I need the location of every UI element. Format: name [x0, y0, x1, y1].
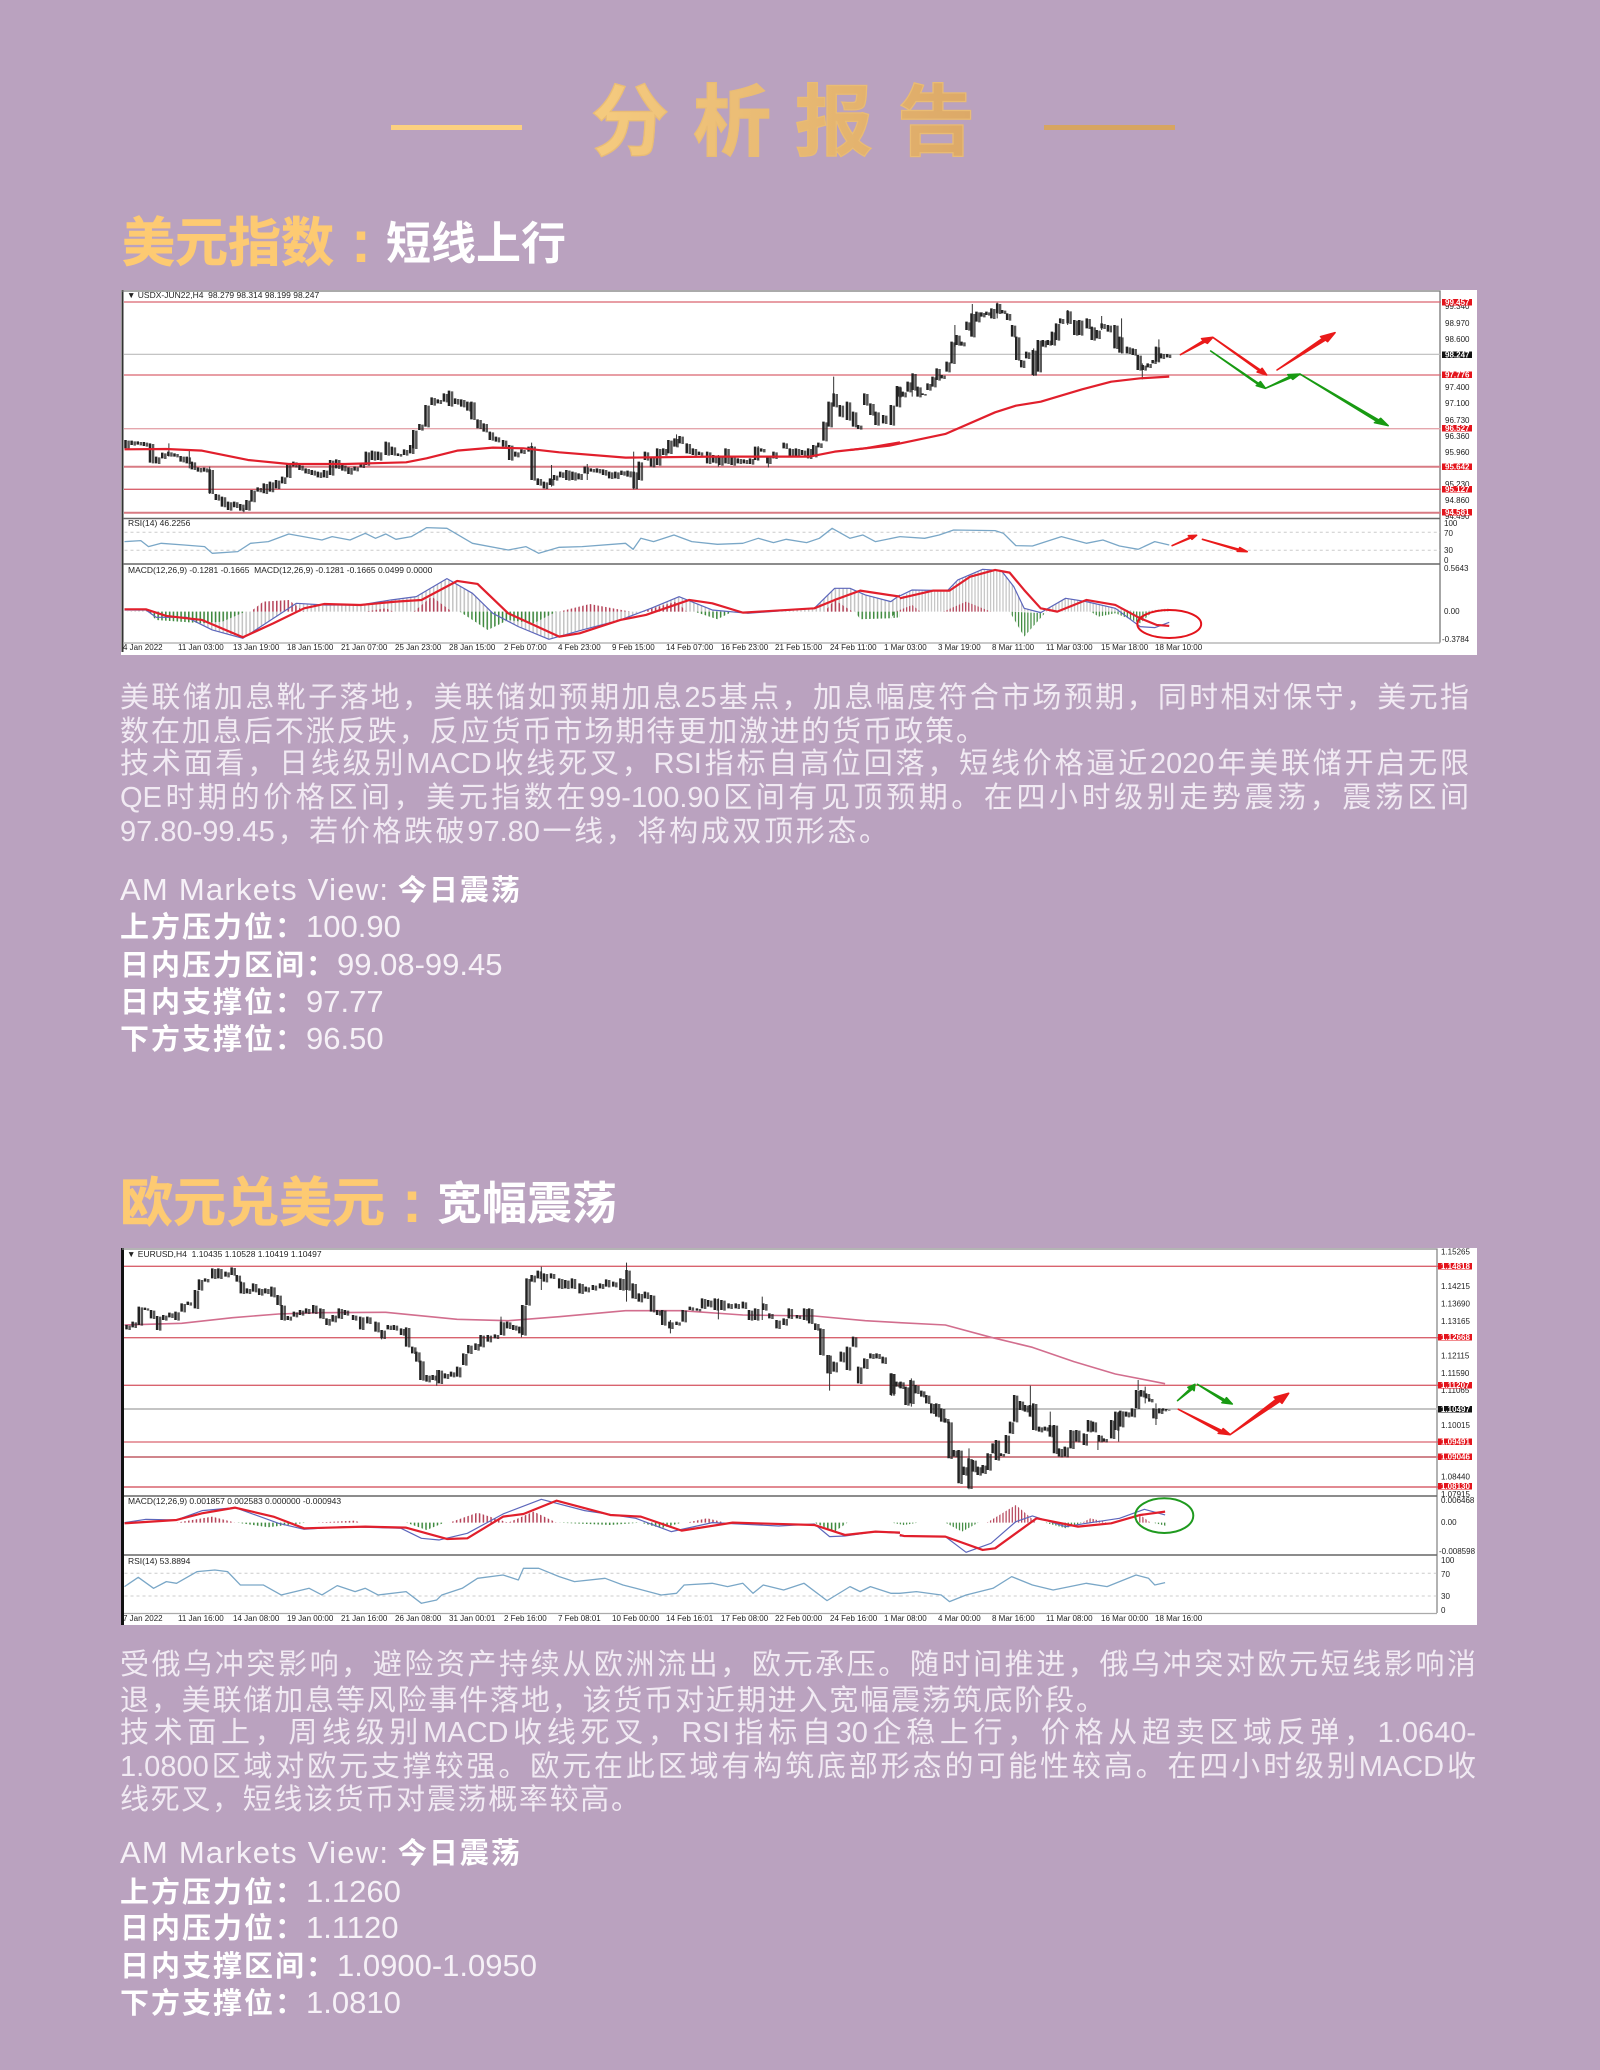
price tags: 95.642	[1445, 462, 1470, 472]
time axis: 24 Feb 11:00	[830, 643, 877, 652]
chart caption texts	[127, 1249, 341, 1566]
time axis: 1 Mar 03:00	[884, 643, 927, 652]
time axis: 25 Jan 23:00	[395, 643, 442, 652]
analysis text: EUR/USD: 技术面上，周线级别MACD收线死叉，RSI指标自30企稳上行，价格从超卖区域反弹，1.0640-	[120, 1717, 1476, 1749]
support and resistance lines	[124, 1266, 1438, 1487]
panes frame	[122, 1248, 1437, 1625]
moving average left	[124, 442, 900, 464]
time axis: 14 Feb 16:01	[666, 1614, 714, 1623]
moving average right	[850, 377, 1169, 450]
market view: US dollar index: 上方压力位：100.90	[120, 909, 401, 944]
price tags: 1.10497	[1441, 1405, 1470, 1414]
candlesticks left	[127, 1263, 894, 1396]
price tags: 1.14818	[1441, 1262, 1470, 1271]
time axis: 4 Mar 00:00	[938, 1614, 981, 1623]
time axis	[123, 643, 1203, 652]
MACD left	[124, 1499, 900, 1540]
analysis text: US dollar index: 技术面看，日线级别MACD收线死叉，RSI指标自高位回落，短线价格逼近2020年美联储开启无限	[120, 748, 1469, 780]
market view: US dollar index	[120, 872, 522, 1056]
price tags: 96.527	[1445, 424, 1470, 433]
title rule right	[1044, 125, 1175, 130]
time axis: 31 Jan 00:01	[449, 1614, 496, 1623]
right half: candles, indicators, forecast arrows	[891, 1323, 1437, 1602]
time axis: 2 Feb 16:00	[504, 1614, 547, 1623]
time axis: 1 Mar 08:00	[884, 1614, 927, 1623]
right price axis: 0	[1444, 556, 1449, 565]
right price axis: 1.13690	[1441, 1300, 1470, 1308]
time axis: 21 Feb 15:00	[775, 643, 823, 652]
market view: EUR/USD: 下方支撑位：1.0810	[120, 1985, 401, 2020]
time axis: 11 Jan 03:00	[178, 643, 224, 652]
right price axis: 94.860	[1445, 496, 1470, 505]
market view: EUR/USD: 上方压力位：1.1260	[120, 1874, 401, 1909]
price tags: 98.247	[1445, 350, 1470, 360]
forecast arrows red	[1172, 333, 1335, 552]
time axis: 9 Feb 15:00	[612, 643, 655, 652]
market view: US dollar index: 日内支撑位：97.77	[120, 984, 384, 1019]
right price axis: 30	[1441, 1592, 1450, 1601]
candlesticks left	[126, 377, 900, 512]
time axis: 7 Feb 08:01	[558, 1614, 601, 1623]
right half: candles, indicators, forecast arrows	[850, 303, 1440, 638]
right price axis	[1442, 302, 1470, 644]
chart caption texts: ▼ USDX-JUN22,H4 98.279 98.314 98.199 98.247	[127, 290, 320, 300]
right price axis: 0.006468	[1441, 1496, 1475, 1505]
market view: EUR/USD: 日内压力位：1.1120	[120, 1910, 399, 1945]
RSI left	[124, 528, 900, 553]
time axis: 17 Feb 08:00	[721, 1614, 769, 1623]
right price axis: 0.00	[1444, 607, 1460, 616]
RSI left	[124, 1568, 900, 1603]
time axis: 11 Jan 16:00	[178, 1614, 224, 1623]
time axis: 26 Jan 08:00	[395, 1614, 442, 1623]
right price axis: 94.490	[1445, 512, 1470, 521]
time axis: 7 Jan 2022	[123, 1614, 163, 1623]
left half: candles and indicators	[124, 1263, 900, 1603]
time axis: 24 Feb 16:00	[830, 1614, 878, 1623]
right price axis: 1.11590	[1441, 1369, 1470, 1378]
time axis: 15 Mar 18:00	[1101, 643, 1149, 652]
right price axis: 1.14215	[1441, 1282, 1470, 1291]
right price axis: 0.00	[1441, 1518, 1457, 1527]
time axis: 8 Mar 16:00	[992, 1614, 1035, 1623]
analysis text: EUR/USD: 1.0800区域对欧元支撑较强。欧元在此区域有构筑底部形态的可能性较高。在四小时级别MACD收	[120, 1751, 1476, 1783]
price tags	[1438, 1262, 1472, 1491]
time axis: 14 Jan 08:00	[233, 1614, 280, 1623]
analysis text: US dollar index: 97.80-99.45，若价格跌破97.80一线，将构成双顶形态。	[120, 816, 888, 848]
market view: US dollar index: AM Markets View: 今日震荡	[120, 872, 522, 907]
heading: EUR/USD	[120, 1168, 617, 1235]
time axis: 13 Jan 19:00	[233, 643, 280, 652]
chart caption texts: MACD(12,26,9) -0.1281 -0.1665 MACD(12,26,9) -0.1281 -0.1665 0.0499 0.0000	[128, 565, 433, 575]
RSI right	[900, 530, 1440, 550]
left half: candles and indicators	[124, 377, 900, 639]
right price axis: 0	[1441, 1606, 1446, 1615]
right price axis: 30	[1444, 546, 1453, 555]
forecast arrows green	[1178, 1384, 1232, 1404]
analysis text: US dollar index: 数在加息后不涨反跌，反应货币市场期待更加激进的货币政策。	[120, 716, 985, 748]
price tags: 1.09491	[1441, 1438, 1470, 1446]
analysis text: EUR/USD: 线死叉，短线该货币对震荡概率较高。	[120, 1784, 640, 1816]
right price axis: 70	[1441, 1570, 1450, 1579]
right price axis: 95.960	[1445, 448, 1470, 457]
price tags: 1.12668	[1441, 1333, 1470, 1342]
analysis text: EUR/USD	[120, 1649, 1476, 1816]
market view: EUR/USD: 日内支撑区间：1.0900-1.0950	[120, 1948, 537, 1983]
RSI right	[900, 1573, 1437, 1602]
right price axis: 1.10015	[1441, 1421, 1470, 1430]
right price axis: 100	[1444, 519, 1458, 528]
market view: US dollar index: 下方支撑位：96.50	[120, 1021, 384, 1056]
time axis: 3 Mar 19:00	[938, 643, 981, 652]
time axis: 16 Feb 23:00	[721, 643, 769, 652]
chart caption texts: RSI(14) 53.8894	[128, 1556, 191, 1566]
right price axis	[1439, 1248, 1476, 1615]
chart caption texts: MACD(12,26,9) 0.001857 0.002583 0.000000 -0.000943	[128, 1496, 341, 1506]
right price axis: -0.008598	[1439, 1547, 1476, 1556]
heading: US dollar index	[122, 208, 566, 275]
right price axis: 1.12115	[1441, 1352, 1470, 1360]
right price axis: -0.3784	[1442, 635, 1470, 644]
market view: EUR/USD	[120, 1835, 537, 2020]
time axis: 8 Mar 11:00	[992, 643, 1035, 652]
chart caption texts	[127, 290, 433, 575]
candlesticks right	[891, 1373, 1169, 1489]
time axis	[123, 1614, 1203, 1623]
time axis: 4 Feb 23:00	[558, 643, 601, 652]
chart caption texts: RSI(14) 46.2256	[128, 518, 191, 528]
time axis: 21 Jan 07:00	[341, 643, 388, 652]
heading colon: :	[351, 208, 371, 275]
time axis: 18 Mar 10:00	[1155, 643, 1203, 652]
analysis text: EUR/USD: 受俄乌冲突影响，避险资产持续从欧洲流出，欧元承压。随时间推进，俄乌冲突对欧元短线影响消	[120, 1649, 1476, 1681]
support and resistance lines	[124, 302, 1441, 513]
price tags: 99.457	[1445, 298, 1470, 307]
price tags: 1.08130	[1441, 1482, 1470, 1491]
time axis: 18 Mar 16:00	[1155, 1614, 1203, 1623]
right price axis: 1.07915	[1441, 1490, 1470, 1499]
time axis: 28 Jan 15:00	[449, 643, 496, 652]
heading white part: 短线上行	[386, 218, 566, 269]
time axis: 19 Jan 00:00	[287, 1614, 334, 1623]
panes frame	[122, 290, 1440, 652]
price tags: 95.127	[1445, 485, 1470, 494]
moving average right	[900, 1323, 1165, 1384]
right price axis: 97.100	[1445, 399, 1470, 408]
right price axis: 1.13165	[1441, 1317, 1470, 1326]
time axis: 18 Jan 15:00	[287, 643, 334, 652]
time axis: 4 Jan 2022	[123, 643, 163, 652]
right price axis: 0.5643	[1444, 564, 1469, 573]
right price axis: 98.970	[1445, 319, 1470, 328]
market view: EUR/USD: AM Markets View: 今日震荡	[120, 1835, 522, 1870]
market view: US dollar index: 日内压力区间：99.08-99.45	[120, 947, 502, 982]
MACD red circle	[1137, 610, 1201, 638]
title	[391, 78, 1175, 166]
heading gold part: 欧元兑美元	[120, 1174, 385, 1233]
right price axis: 99.340	[1445, 302, 1470, 311]
analysis text: EUR/USD: 退，美联储加息等风险事件落地，该货币对近期进入宽幅震荡筑底阶段。	[120, 1685, 1105, 1717]
time axis: 11 Mar 03:00	[1046, 643, 1093, 652]
analysis text: US dollar index	[120, 682, 1469, 848]
right price axis: 1.11065	[1441, 1386, 1470, 1395]
price tags: 97.776	[1445, 370, 1470, 380]
right price axis: 96.730	[1445, 416, 1470, 425]
time axis: 2 Feb 07:00	[504, 643, 547, 652]
time axis: 16 Mar 00:00	[1101, 1614, 1149, 1623]
analysis text: US dollar index: QE时期的价格区间，美元指数在99-100.90区间有见顶预期。在四小时级别走势震荡，震荡区间	[120, 782, 1469, 814]
time axis: 21 Jan 16:00	[341, 1614, 388, 1623]
chart: USDX H4	[121, 290, 1477, 655]
right price axis: 97.400	[1445, 383, 1470, 392]
price tags: 94.581	[1445, 508, 1470, 517]
chart: EURUSD H4	[121, 1248, 1477, 1625]
forecast arrows green	[1211, 351, 1388, 426]
right price axis: 1.08440	[1441, 1472, 1470, 1482]
time axis: 10 Feb 00:00	[612, 1614, 660, 1623]
time axis: 22 Feb 00:00	[775, 1614, 823, 1623]
right price axis: 95.230	[1445, 480, 1470, 489]
MACD green circle	[1135, 1498, 1193, 1533]
heading colon: :	[402, 1168, 422, 1235]
MACD left	[124, 579, 900, 639]
title text: 分析报告	[591, 78, 999, 166]
MACD right	[891, 1505, 1166, 1552]
forecast arrows red	[1178, 1393, 1289, 1435]
price tags	[1442, 298, 1472, 517]
title rule left	[391, 125, 522, 130]
right price axis: 100	[1441, 1556, 1455, 1565]
price tags: 1.09046	[1441, 1452, 1470, 1462]
heading white part: 宽幅震荡	[437, 1178, 617, 1229]
chart caption texts: ▼ EURUSD,H4 1.10435 1.10528 1.10419 1.10497	[127, 1249, 322, 1259]
MACD right	[891, 569, 1169, 637]
right price axis: 98.600	[1445, 335, 1470, 344]
right price axis: 70	[1444, 529, 1453, 538]
candlesticks right	[898, 303, 1170, 397]
analysis text: US dollar index: 美联储加息靴子落地，美联储如预期加息25基点，加息幅度符合市场预期，同时相对保守，美元指	[120, 682, 1469, 714]
time axis: 14 Feb 07:00	[666, 643, 714, 652]
heading gold part: 美元指数	[122, 214, 334, 273]
price tags: 1.11207	[1441, 1381, 1470, 1390]
right price axis: 96.360	[1445, 432, 1470, 441]
time axis: 11 Mar 08:00	[1046, 1614, 1093, 1623]
moving average left	[124, 1311, 900, 1325]
